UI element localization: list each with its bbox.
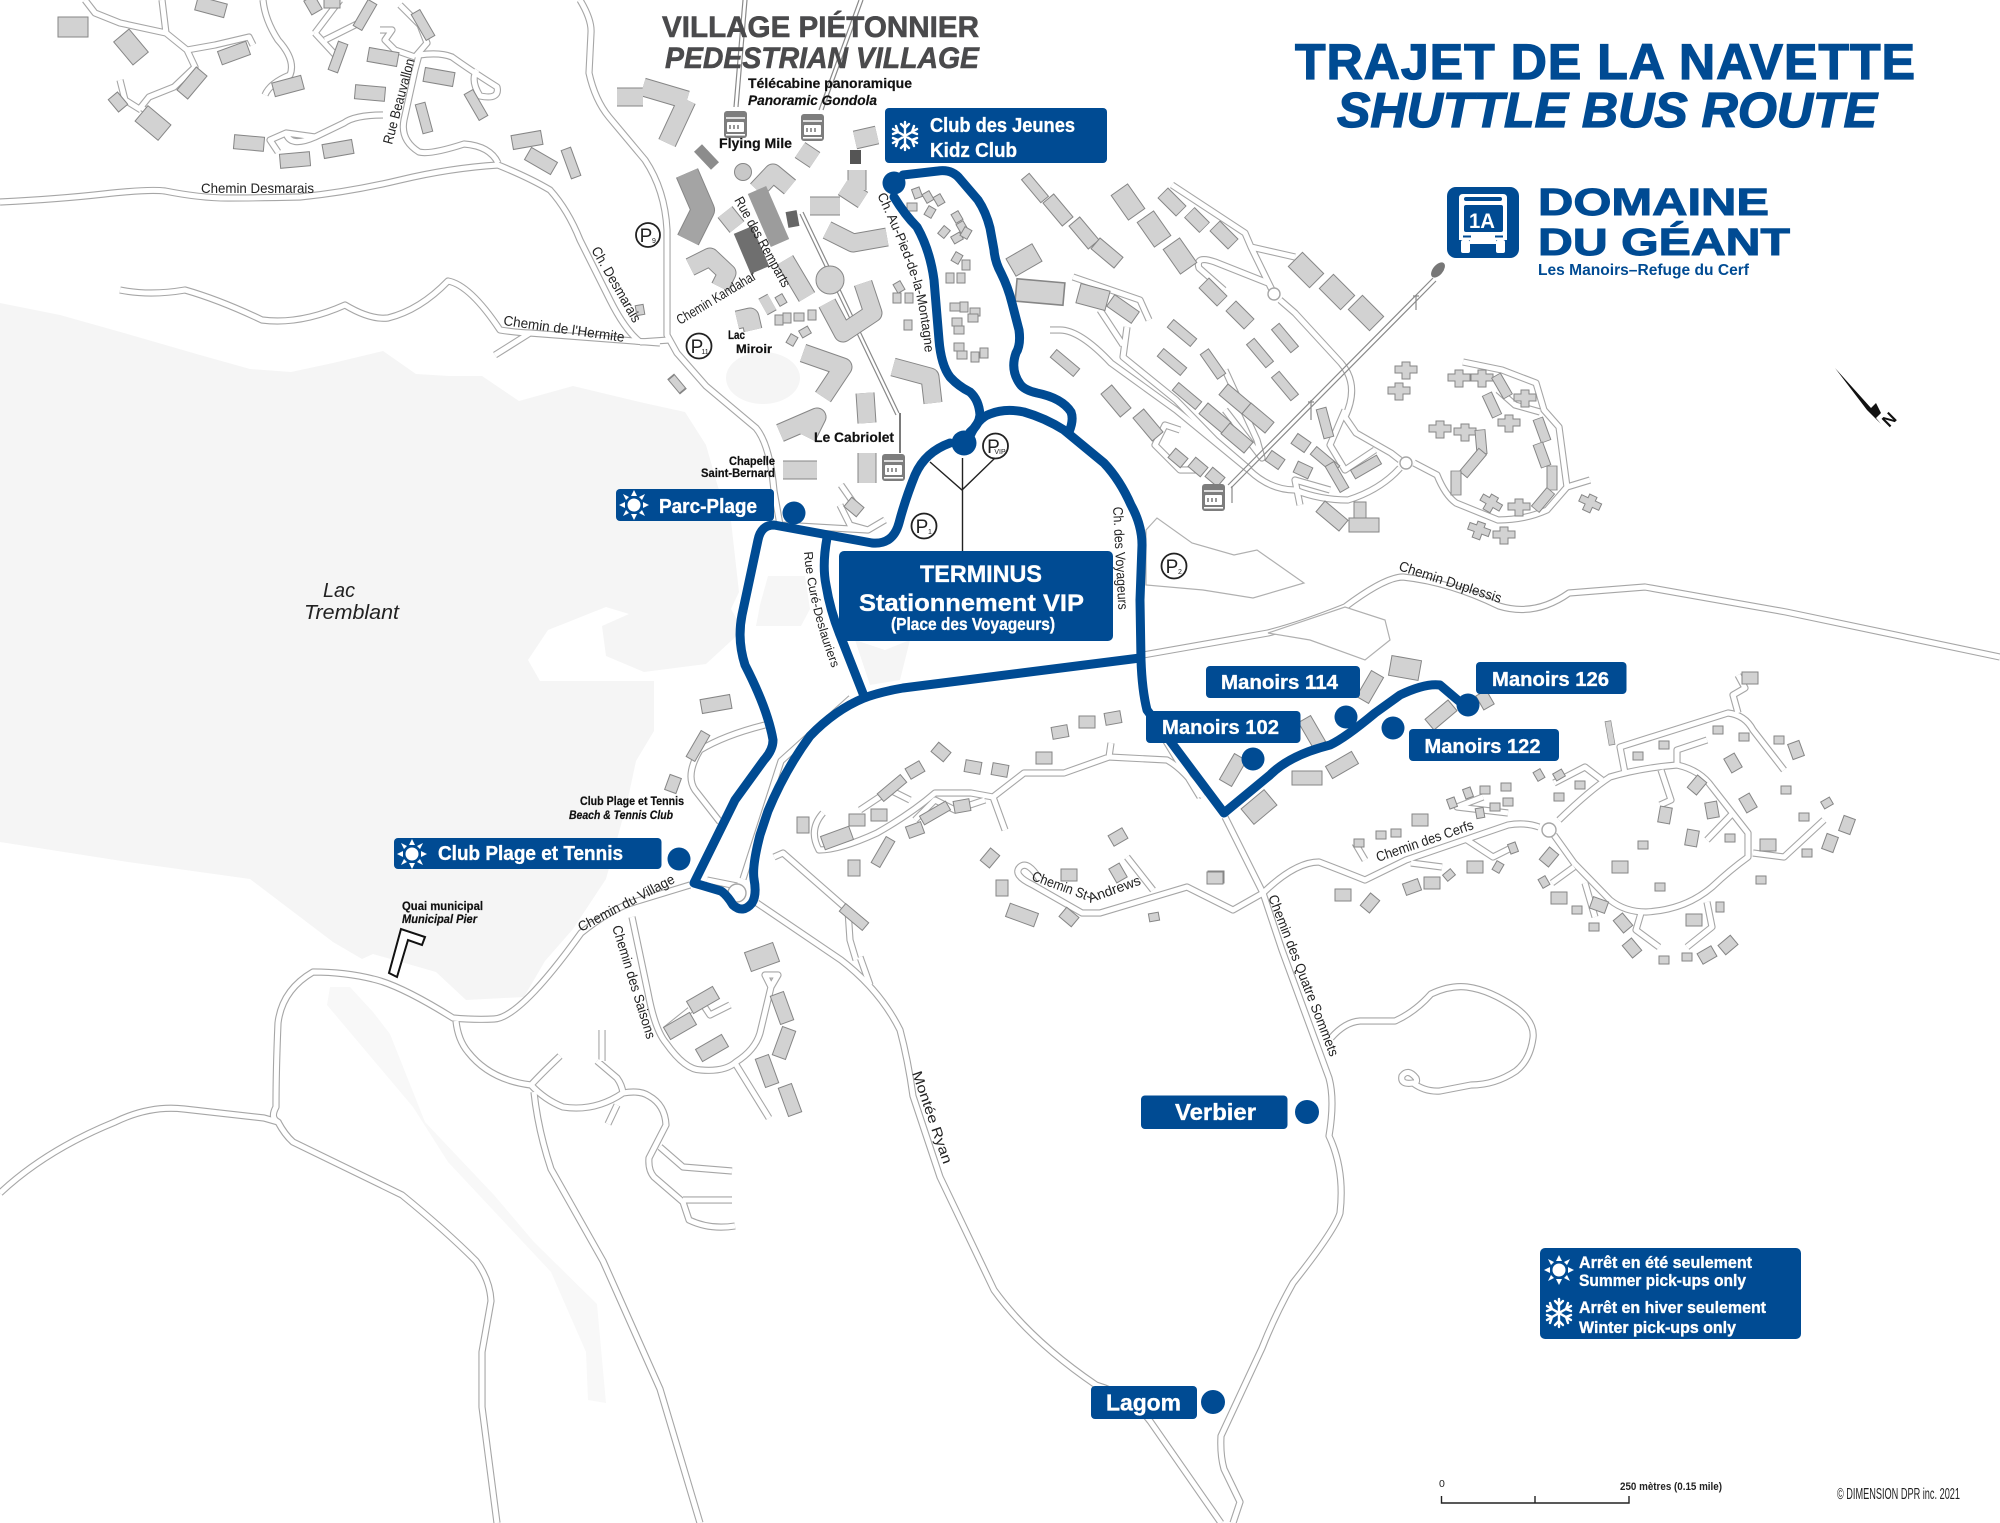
icon: sun (1544, 1255, 1574, 1285)
north arrow: N (1878, 409, 1901, 431)
north-east residential buildings (1006, 173, 1603, 544)
road name labels: Chemin des Quatre Sommets (1265, 892, 1342, 1058)
title: SHUTTLE BUS ROUTE (1337, 84, 1878, 138)
pond near route (855, 640, 910, 685)
village place labels: Municipal Pier (402, 914, 477, 926)
parking P9: 9 (652, 238, 656, 245)
stop label: Manoirs 102: Manoirs 102 (1162, 717, 1279, 739)
bus route badge (1447, 187, 1519, 258)
terminus label: TERMINUS (920, 561, 1042, 588)
parking P2: P (1166, 557, 1178, 578)
village place labels: Le Cabriolet (814, 429, 894, 445)
village place labels: Chapelle (729, 456, 775, 468)
stop label: Club des Jeunes: Kidz Club (930, 140, 1017, 162)
parking lot east of Voyageurs (1268, 607, 1390, 660)
gondola icons (724, 111, 1225, 511)
parking P1 (912, 514, 936, 538)
gondola cable lines (734, 0, 1436, 503)
bus route badge: 1A (1469, 210, 1495, 233)
municipal pier (389, 929, 425, 977)
road name labels: Chemin de l'Hermite (503, 312, 626, 345)
parking P2 (1162, 554, 1186, 578)
Lac Tremblant water area (0, 303, 743, 1000)
road name labels: Rue des Remparts (731, 194, 794, 290)
title (1295, 34, 1915, 138)
parking P9: P (640, 226, 652, 247)
road name labels: Chemin Duplessis (1397, 558, 1504, 606)
road name labels: Ch. des Voyageurs (1110, 506, 1131, 610)
scale bar (1439, 1478, 1722, 1503)
icon: snowflake (1547, 1299, 1571, 1327)
road name labels (201, 57, 1518, 1166)
road name labels: Chemin des Cerfs (1374, 817, 1475, 865)
village place labels (402, 75, 912, 926)
stop label: Club Plage et Tennis: Club Plage et Tennis (438, 843, 623, 865)
stop label: Manoirs 122: Manoirs 122 (1424, 736, 1540, 758)
lake name (304, 580, 401, 624)
village place labels: Saint-Bernard (701, 468, 775, 480)
road name labels: Andrews (1086, 872, 1143, 906)
road name labels: Chemin du Village (575, 871, 677, 935)
village place labels: Panoramic Gondola (748, 92, 877, 108)
route name: Les Manoirs–Refuge du Cerf (1538, 262, 1750, 279)
gondola top station (1428, 260, 1448, 280)
pedestrian village buildings (617, 87, 933, 483)
parking P VIP: P (987, 437, 1000, 458)
route name (1538, 182, 1790, 279)
north arrow (1835, 368, 1901, 431)
village heading (662, 10, 980, 75)
legend text: Summer pick-ups only (1579, 1271, 1746, 1290)
lake name: Lac (323, 580, 355, 602)
village place labels: Club Plage et Tennis (580, 796, 684, 808)
terminus leader lines (930, 458, 995, 551)
stop label: Verbier (1141, 1096, 1288, 1129)
parking P1: P (916, 517, 928, 538)
parking P VIP (983, 434, 1008, 458)
stop label: Club des Jeunes: Club des Jeunes (930, 115, 1075, 137)
parking P VIP: VIP (994, 449, 1006, 456)
stop label: Club des Jeunes (885, 108, 1107, 163)
stop dots (668, 172, 1480, 1414)
village place labels: Flying Mile (719, 135, 792, 151)
title: TRAJET DE LA NAVETTE (1295, 34, 1915, 90)
stop label: Manoirs 102 (1146, 711, 1300, 743)
small chalets between route branches (775, 187, 988, 362)
village place labels: Miroir (736, 342, 772, 356)
water patch beside Curé-Deslauriers (756, 576, 810, 626)
lake name: Tremblant (304, 602, 401, 624)
shuttle route (694, 171, 1460, 909)
road name labels: Montée Ryan (909, 1069, 956, 1166)
stop label: Manoirs 114 (1206, 666, 1360, 698)
scale bar: 250 mètres (0.15 mile) (1620, 1481, 1722, 1493)
parking area P2 outline (1146, 518, 1304, 598)
legend (1540, 1248, 1801, 1339)
parking markers (636, 223, 1186, 578)
road name labels: Ch. Desmarais (588, 244, 645, 325)
village place labels: Lac (728, 328, 745, 342)
Lac Miroir water area (726, 352, 800, 404)
roundabouts (728, 288, 1556, 902)
road name labels: Chemin Kandahar (673, 267, 759, 328)
west and south residential buildings (58, 0, 1855, 1116)
route name: DU GÉANT (1538, 220, 1790, 264)
village place labels: Télécabine panoramique (748, 75, 912, 91)
stop label: Manoirs 122 (1409, 729, 1559, 761)
stop label: Parc-Plage: Parc-Plage (659, 496, 757, 518)
terminus label (839, 551, 1113, 641)
stream (327, 987, 606, 1403)
legend text: Arrêt en hiver seulement (1579, 1298, 1766, 1317)
stop label: Club Plage et Tennis (394, 838, 662, 869)
road name labels: Chemin Desmarais (201, 180, 314, 196)
route name: DOMAINE (1538, 182, 1769, 224)
stop label: Manoirs 126 (1476, 662, 1626, 694)
road name labels: Ch. Au-Pied-de-la-Montagne (878, 193, 932, 352)
road name labels: Chemin des Saisons (609, 923, 659, 1041)
terminus label: (Place des Voyageurs) (891, 614, 1055, 634)
scale bar: 0 (1439, 1478, 1445, 1490)
stop label: Parc-Plage (616, 489, 774, 521)
village place labels: Beach & Tennis Club (569, 810, 673, 822)
legend text: Winter pick-ups only (1579, 1318, 1737, 1337)
road name labels: Rue Curé-Deslauriers (804, 552, 838, 668)
legend text (1579, 1253, 1766, 1337)
parking P9 (636, 223, 660, 247)
stop label: Manoirs 114: Manoirs 114 (1221, 672, 1339, 694)
stop label: Verbier: Verbier (1175, 1099, 1256, 1125)
village place labels: Quai municipal (402, 901, 483, 913)
parking P11: P (691, 337, 703, 358)
stop label: Lagom (1091, 1386, 1197, 1419)
road name labels: Rue Beauvallon (379, 57, 418, 146)
road name labels: Chemin St- (1030, 868, 1094, 904)
parking P11: 11 (701, 349, 709, 356)
village heading: PEDESTRIAN VILLAGE (665, 42, 980, 75)
legend text: Arrêt en été seulement (1579, 1253, 1752, 1272)
stop label: Manoirs 126: Manoirs 126 (1492, 669, 1609, 691)
parking P1: 1 (928, 529, 932, 536)
village heading: VILLAGE PIÉTONNIER (662, 10, 979, 44)
terminus label: Stationnement VIP (859, 590, 1084, 617)
parking P11 (686, 334, 712, 358)
stop label: Lagom: Lagom (1106, 1390, 1181, 1416)
parking P2: 2 (1178, 569, 1182, 576)
